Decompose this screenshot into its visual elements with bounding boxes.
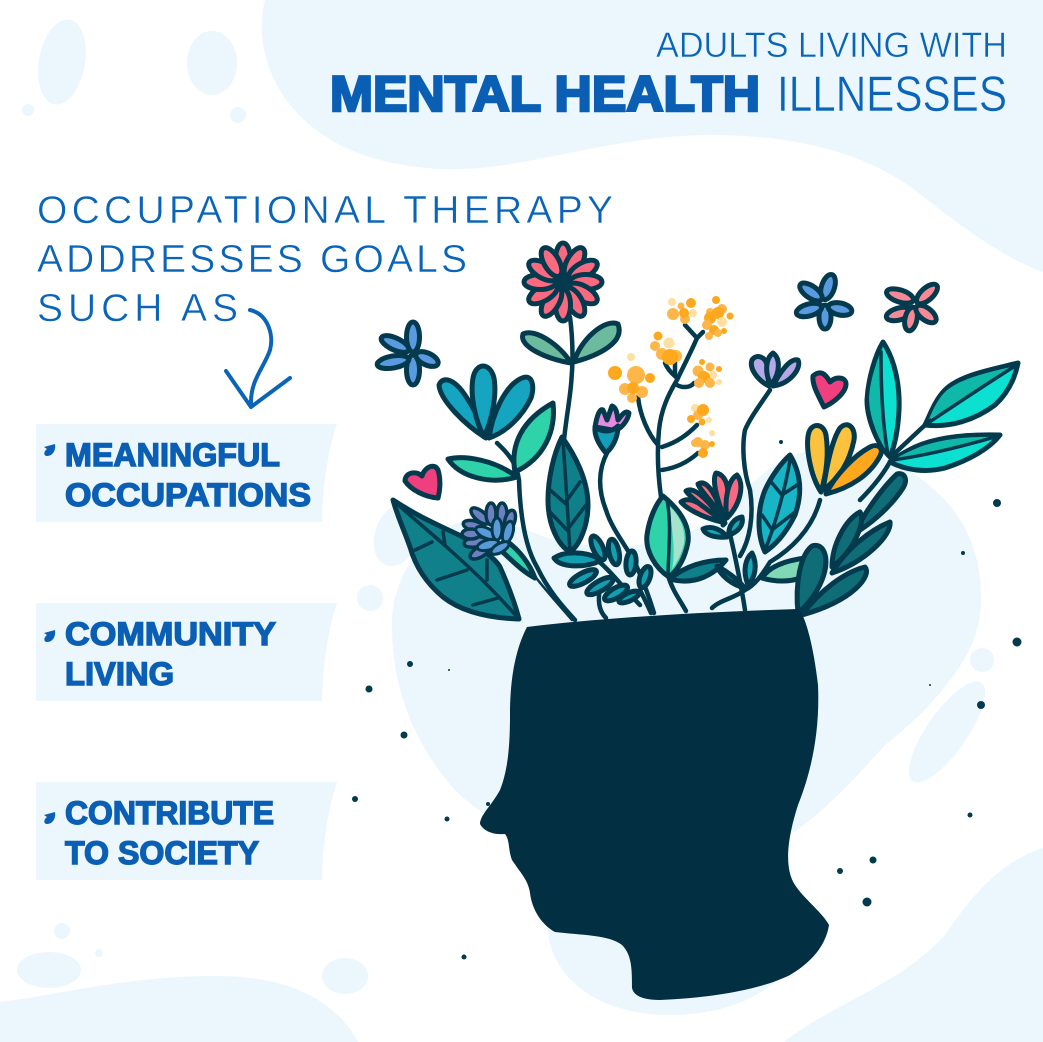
item: community living xyxy=(36,603,337,701)
leaf: central dark xyxy=(548,437,588,552)
item: community living: COMMUNITY xyxy=(65,616,276,652)
flower: pink bud xyxy=(595,406,629,453)
flower: violet xyxy=(751,353,799,386)
clover flower xyxy=(462,503,535,578)
flower: pink daisy xyxy=(524,243,602,321)
intro text xyxy=(37,189,613,330)
leaves: bright teal xyxy=(867,342,1018,470)
intro text: ADDRESSES GOALS xyxy=(37,238,467,281)
plant stems xyxy=(497,317,925,620)
item: community living: LIVING xyxy=(65,656,174,692)
leaf: teal veined xyxy=(759,455,800,552)
heart: left xyxy=(405,466,440,498)
item: contribute to society: TO SOCIETY xyxy=(65,835,259,871)
scattered dots xyxy=(352,440,1022,960)
leaf: mid green xyxy=(647,496,688,577)
teal-green side leaves xyxy=(448,403,553,480)
flower: teal three-petal xyxy=(439,366,533,438)
title xyxy=(330,26,1007,122)
title: ILLNESSES xyxy=(777,66,1007,122)
arrow xyxy=(226,310,290,407)
leaf: pale green lower xyxy=(762,558,805,581)
tulip small leaves xyxy=(703,517,755,588)
flower: blue left xyxy=(376,322,440,385)
orange blossoms xyxy=(608,296,734,458)
intro text: OCCUPATIONAL THERAPY xyxy=(37,189,613,232)
flower: yellow tulip xyxy=(808,425,881,494)
daisy leaves xyxy=(522,323,619,363)
item: contribute to society: CONTRIBUTE xyxy=(65,795,274,831)
title: ADULTS LIVING WITH xyxy=(656,26,1007,65)
leaves: dark teal cluster xyxy=(797,474,905,615)
heart: right xyxy=(813,373,846,407)
item: contribute to society xyxy=(36,782,337,880)
intro text: SUCH AS xyxy=(37,287,238,330)
leaf: big lower left xyxy=(393,500,519,619)
title: MENTAL HEALTH xyxy=(330,66,760,122)
item: meaningful occupations xyxy=(36,424,337,522)
item: meaningful occupations: OCCUPATIONS xyxy=(65,477,311,513)
flower: pink top xyxy=(885,281,941,332)
head silhouette xyxy=(480,609,829,1000)
leaf: small dark teal xyxy=(670,560,726,581)
item: meaningful occupations: MEANINGFUL xyxy=(65,437,280,473)
flower: blue top xyxy=(795,273,853,329)
fern xyxy=(554,534,653,605)
flower: pink tulip xyxy=(681,473,741,525)
